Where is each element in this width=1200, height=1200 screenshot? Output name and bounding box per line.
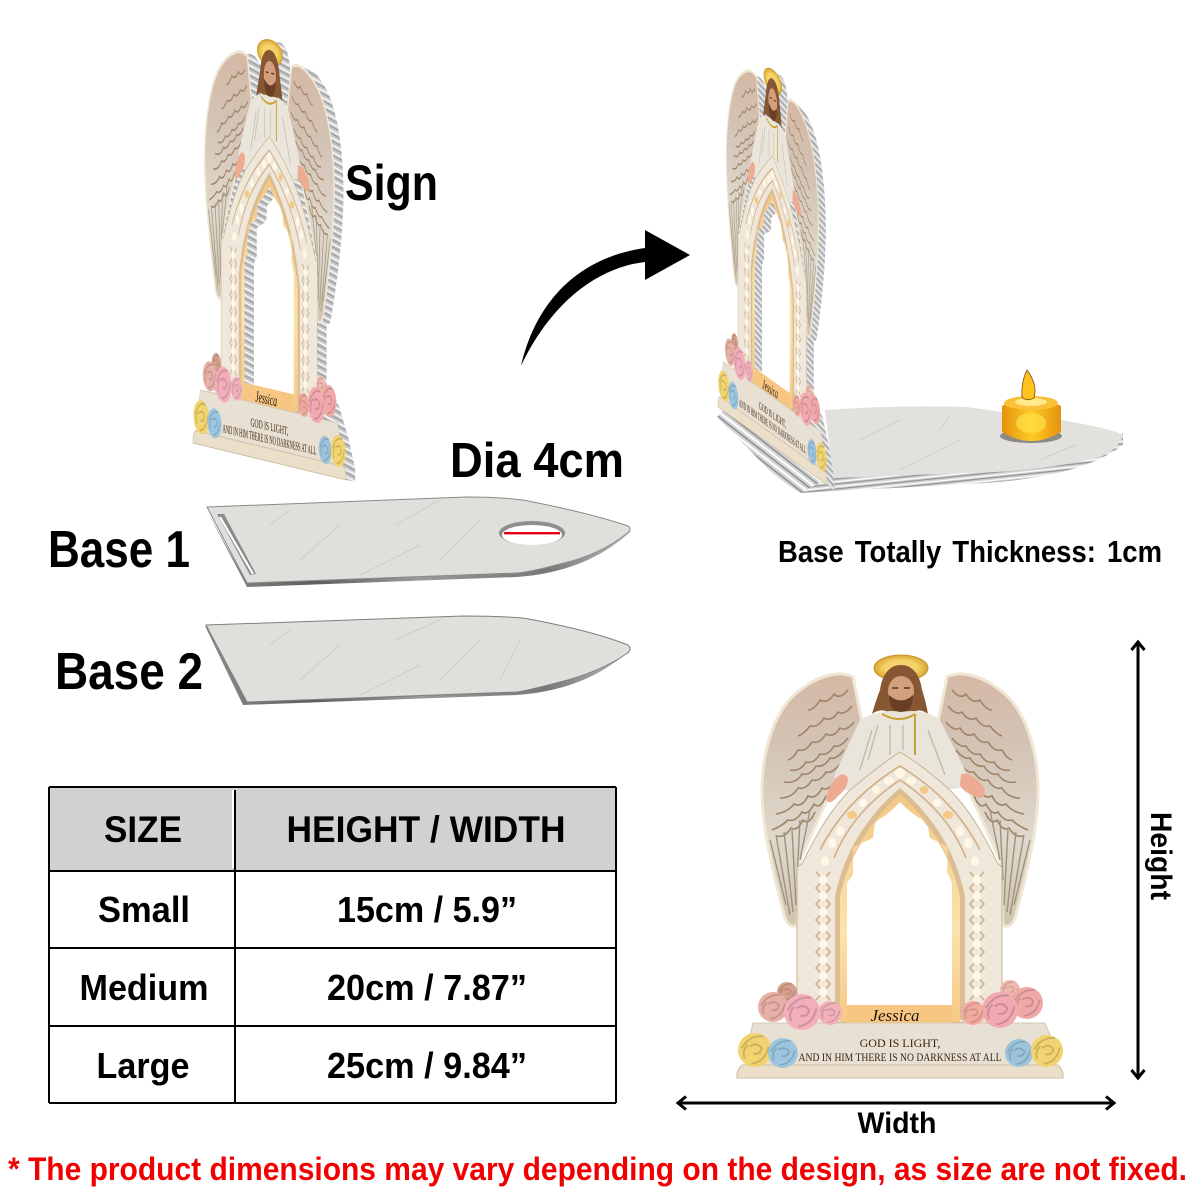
candle (1000, 370, 1062, 443)
assembled product: base with sign and candle (717, 31, 1123, 493)
row large: Large (96, 1045, 190, 1086)
assembled sign: GOD IS LIGHT, (759, 400, 786, 430)
size table (49, 787, 616, 1103)
sign illustration: Jessica (255, 387, 277, 410)
label: Width: Width (858, 1107, 936, 1140)
curved arrow (521, 230, 690, 366)
assembled base top surface (825, 406, 1123, 478)
front view product: AND IN HIM THERE IS NO DARKNESS AT ALL (798, 1050, 1002, 1064)
diameter hole (499, 521, 565, 545)
assembled sign (718, 31, 834, 490)
table header: height / width: HEIGHT / WIDTH (286, 809, 566, 850)
front view product (737, 655, 1063, 1078)
sign illustration: AND IN HIM THERE IS NO DARKNESS AT ALL (223, 423, 316, 459)
front view product: GOD IS LIGHT, (860, 1036, 940, 1050)
height arrow (1132, 642, 1144, 1078)
row large value: 25cm / 9.84” (327, 1045, 527, 1086)
label: Base 1: Base 1 (48, 521, 190, 579)
label: Base 2: Base 2 (55, 643, 203, 701)
base 1 plate (207, 497, 630, 587)
label: base thickness: Base Totally Thickness: 1cm (778, 534, 1162, 569)
table header: size: SIZE (104, 809, 182, 850)
assembled base left edge (717, 406, 835, 493)
red diameter line (504, 532, 560, 534)
base 2 plate (205, 616, 630, 705)
sign illustration: GOD IS LIGHT, (250, 417, 288, 439)
row small value: 15cm / 5.9” (337, 889, 517, 930)
width arrow (678, 1096, 1114, 1110)
row medium value: 20cm / 7.87” (327, 967, 527, 1008)
row medium: Medium (80, 967, 208, 1008)
assembled sign: AND IN HIM THERE IS NO DARKNESS AT ALL (739, 397, 806, 456)
label: Height: Height (1144, 812, 1177, 900)
assembled sign: Jessica (762, 376, 778, 403)
row small: Small (98, 889, 190, 930)
slot (217, 514, 256, 575)
label: Dia 4cm: Dia 4cm (450, 434, 624, 488)
label: Sign: Sign (345, 155, 438, 211)
assembled base front edge (800, 433, 1123, 493)
front view product: Jessica (870, 1006, 920, 1025)
sign illustration (193, 21, 355, 482)
